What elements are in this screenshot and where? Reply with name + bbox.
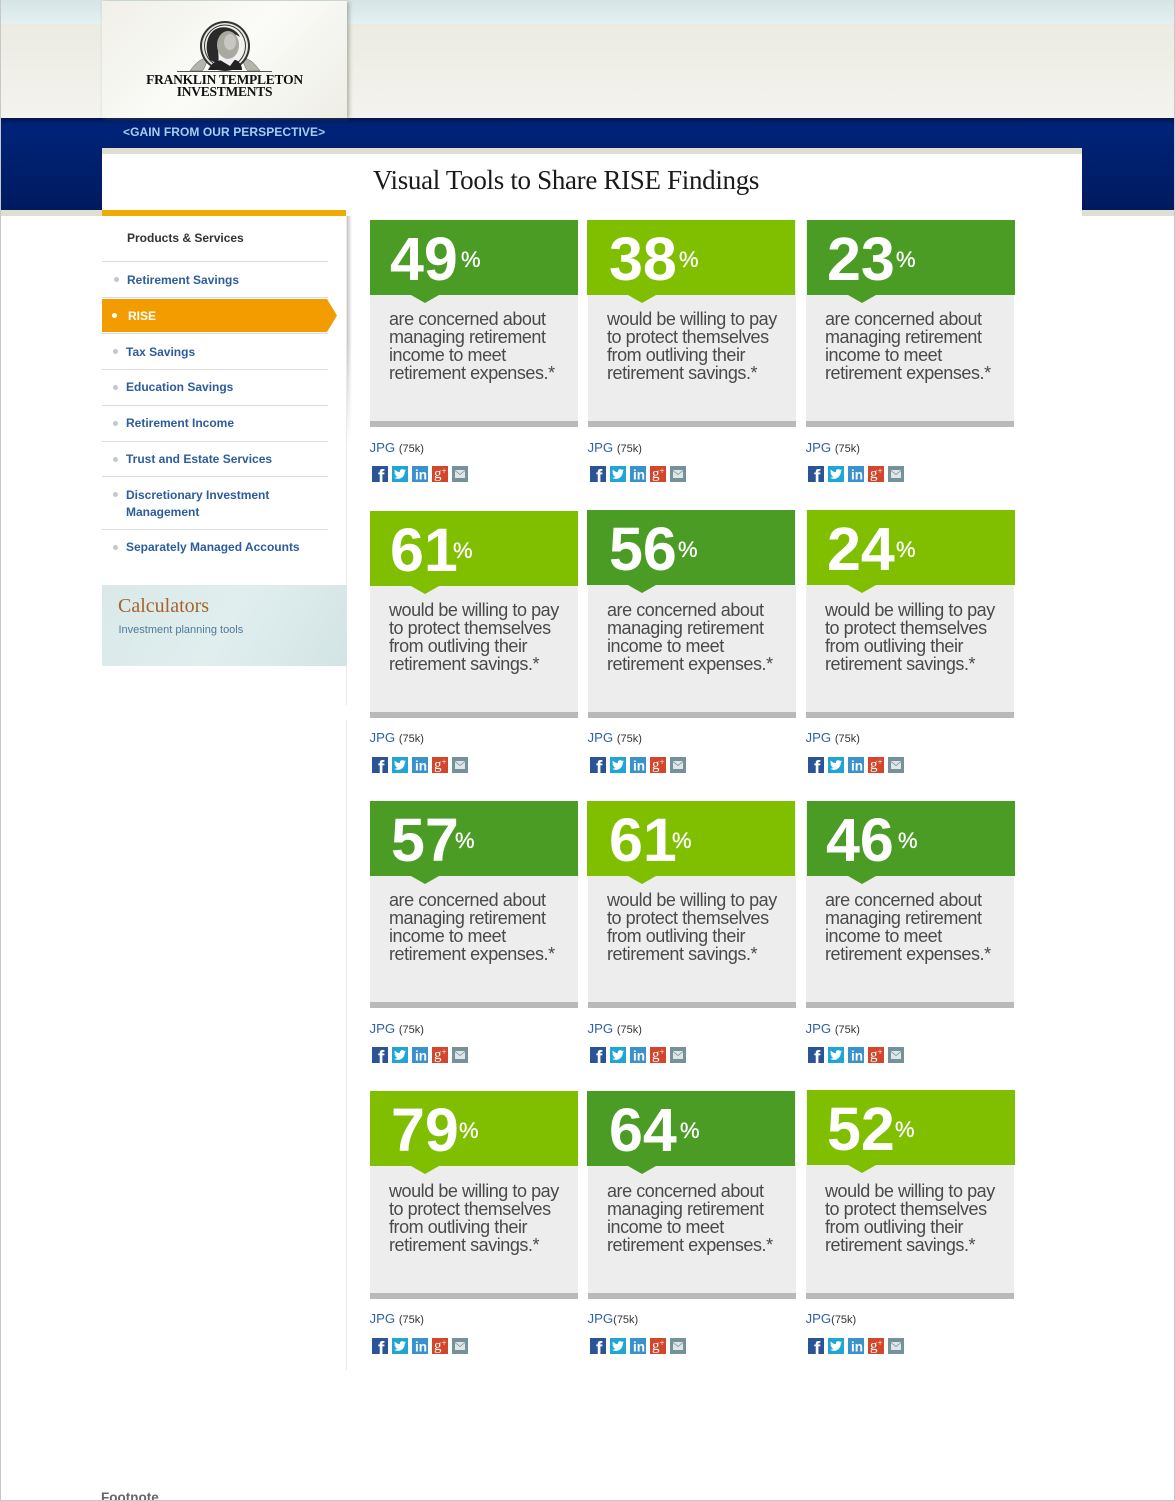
download link row 2 col 3: JPG (75k) <box>806 730 860 745</box>
card: 79%: from outliving their <box>389 1217 527 1237</box>
card: 23%: income to meet <box>825 345 942 365</box>
card: 23%: retirement expenses.* <box>825 363 991 383</box>
social icons row 2 col 3: + <box>878 757 883 767</box>
card: 56%: managing retirement <box>607 618 764 638</box>
nav item: RISE active <box>102 299 337 332</box>
download link row 1 col 1: JPG (75k) <box>370 440 424 455</box>
download link row 2 col 1: JPG (75k) <box>370 730 424 745</box>
nav item: RISE active: RISE <box>128 309 156 323</box>
card: 64%: are concerned about <box>607 1181 764 1201</box>
card: 46%: % <box>898 828 918 853</box>
card: 46%: income to meet <box>825 926 942 946</box>
card: 52%: retirement savings.* <box>825 1235 975 1255</box>
social icons row 4 col 2 <box>590 1338 686 1354</box>
card: 64%: retirement expenses.* <box>607 1235 773 1255</box>
social icons row 1 col 1 <box>372 466 468 482</box>
card: 52% <box>806 1090 1014 1299</box>
social icons row 1 col 2: + <box>660 466 665 476</box>
card: 38%: to protect themselves <box>607 327 769 347</box>
social icons row 4 col 2: + <box>660 1338 665 1348</box>
card: 24%: 24 <box>827 515 895 583</box>
social icons row 4 col 1 <box>372 1338 468 1354</box>
nav item: Tax Savings: Tax Savings <box>126 345 195 359</box>
card: 49%: 49 <box>390 225 458 293</box>
social icons row 3 col 3: + <box>878 1047 883 1057</box>
social icons row 1 col 3: + <box>878 466 883 476</box>
card: 52%: from outliving their <box>825 1217 963 1237</box>
nav item: Discretionary Investment Management: Management <box>126 505 199 519</box>
tagline: <GAIN FROM OUR PERSPECTIVE> <box>123 125 325 139</box>
download link row 1 col 3: JPG (75k) <box>806 440 860 455</box>
sidebar top accent <box>102 210 346 216</box>
card: 57%: managing retirement <box>389 908 546 928</box>
card: 23% <box>806 220 1014 427</box>
card: 49%: income to meet <box>389 345 506 365</box>
social icons row 4 col 2: g <box>652 1338 660 1354</box>
social icons row 2 col 1 <box>372 757 468 773</box>
card: 61%: to protect themselves <box>389 618 551 638</box>
card: 56%: income to meet <box>607 636 724 656</box>
social icons row 3 col 1 <box>372 1047 468 1063</box>
sidebar shadow <box>347 216 352 430</box>
calculators heading: Calculators <box>118 595 209 617</box>
card: 61%: retirement savings.* <box>389 654 539 674</box>
header top band <box>0 0 1175 24</box>
logo wordmark: INVESTMENTS <box>177 84 272 99</box>
card: 61%: % <box>453 538 473 563</box>
card: 24% <box>806 510 1014 718</box>
card: 23%: % <box>896 247 916 272</box>
social icons row 2 col 1: g <box>434 757 442 773</box>
download link row 3 col 3: JPG (75k) <box>806 1021 860 1036</box>
card: 64% <box>588 1091 796 1299</box>
card: 49%: managing retirement <box>389 327 546 347</box>
download link row 4 col 2: JPG(75k) <box>588 1311 638 1326</box>
download link row 2 col 2: JPG (75k) <box>588 730 642 745</box>
page title: Visual Tools to Share RISE Findings <box>373 165 759 195</box>
card: 64%: managing retirement <box>607 1199 764 1219</box>
card: 49%: retirement expenses.* <box>389 363 555 383</box>
social icons row 1 col 1: + <box>442 466 447 476</box>
card: 56%: % <box>678 537 698 562</box>
card: 46% <box>806 801 1014 1008</box>
social icons row 2 col 3 <box>808 757 904 773</box>
social icons row 3 col 2: g <box>652 1047 660 1063</box>
social icons row 4 col 1: + <box>442 1338 447 1348</box>
card: 52%: 52 <box>827 1095 895 1163</box>
social icons row 4 col 1: g <box>434 1338 442 1354</box>
card: 23%: are concerned about <box>825 309 982 329</box>
card: 56% <box>588 510 796 718</box>
calculators panel <box>102 585 347 666</box>
sidebar navigation <box>102 210 346 554</box>
social icons row 2 col 2: g <box>652 757 660 773</box>
social icons row 1 col 1: g <box>434 466 442 482</box>
download link row 3 col 1: JPG (75k) <box>370 1021 424 1036</box>
nav item: Education Savings: Education Savings <box>126 380 233 394</box>
social icons row 1 col 2 <box>590 466 686 482</box>
card: 79%: 79 <box>391 1096 459 1164</box>
card: 56%: retirement expenses.* <box>607 654 773 674</box>
card: 64%: 64 <box>609 1096 677 1164</box>
card: 52%: would be willing to pay <box>825 1181 995 1201</box>
download link row 3 col 2: JPG (75k) <box>588 1021 642 1036</box>
card: 61%: 61 <box>390 516 458 584</box>
header cream band <box>0 24 1175 118</box>
card: 64%: % <box>680 1118 700 1143</box>
card: 61% second: 61 <box>609 806 677 874</box>
card: 57%: % <box>455 828 475 853</box>
card: 61% second: from outliving their <box>607 926 745 946</box>
card: 52%: to protect themselves <box>825 1199 987 1219</box>
card: 24%: % <box>896 537 916 562</box>
card: 46%: managing retirement <box>825 908 982 928</box>
card: 56%: are concerned about <box>607 600 764 620</box>
social icons row 4 col 3: + <box>878 1338 883 1348</box>
nav item: Separately Managed Accounts: Separately Managed Accounts <box>126 540 300 554</box>
card: 49%: are concerned about <box>389 309 546 329</box>
card: 61% second: would be willing to pay <box>607 890 777 910</box>
social icons row 2 col 2 <box>590 757 686 773</box>
nav item: Discretionary Investment Management: Discretionary Investment <box>126 488 269 502</box>
download link row 1 col 2: JPG (75k) <box>588 440 642 455</box>
social icons row 2 col 3: g <box>870 757 878 773</box>
card: 57%: retirement expenses.* <box>389 944 555 964</box>
social icons row 3 col 2 <box>590 1047 686 1063</box>
social icons row 4 col 3 <box>808 1338 904 1354</box>
social icons row 1 col 3: g <box>870 466 878 482</box>
card: 38%: retirement savings.* <box>607 363 757 383</box>
card: 79%: retirement savings.* <box>389 1235 539 1255</box>
card: 61% <box>370 511 578 718</box>
social icons row 3 col 2: + <box>660 1047 665 1057</box>
social icons row 3 col 1: g <box>434 1047 442 1063</box>
card: 38%: would be willing to pay <box>607 309 777 329</box>
card: 61%: from outliving their <box>389 636 527 656</box>
card: 79%: to protect themselves <box>389 1199 551 1219</box>
card: 57%: 57 <box>391 806 459 874</box>
social icons row 2 col 2: + <box>660 757 665 767</box>
download link row 4 col 1: JPG (75k) <box>370 1311 424 1326</box>
sidebar right rule <box>346 216 347 1370</box>
social icons row 3 col 3 <box>808 1047 904 1063</box>
card: 79%: would be willing to pay <box>389 1181 559 1201</box>
icon: Franklin portrait emblem <box>177 21 272 72</box>
card: 61% second: % <box>672 828 692 853</box>
card: 49% <box>370 220 578 427</box>
card: 61% second: to protect themselves <box>607 908 769 928</box>
card: 23%: managing retirement <box>825 327 982 347</box>
social icons row 4 col 3: g <box>870 1338 878 1354</box>
card: 24%: would be willing to pay <box>825 600 995 620</box>
card: 57%: are concerned about <box>389 890 546 910</box>
card: 24%: from outliving their <box>825 636 963 656</box>
social icons row 2 col 1: + <box>442 757 447 767</box>
card: 23%: 23 <box>827 225 895 293</box>
card: 46%: are concerned about <box>825 890 982 910</box>
card: 38%: from outliving their <box>607 345 745 365</box>
logo wordmark: FRANKLIN TEMPLETON <box>146 72 303 87</box>
nav item: Trust and Estate Services: Trust and Estate Services <box>126 452 272 466</box>
content panel <box>102 148 1082 216</box>
nav heading: Products & Services <box>127 231 244 245</box>
card: 61% second <box>588 801 796 1008</box>
social icons row 3 col 3: g <box>870 1047 878 1063</box>
card: 38%: % <box>679 247 699 272</box>
download link row 4 col 3: JPG(75k) <box>806 1311 856 1326</box>
card: 49%: % <box>461 247 481 272</box>
nav item: Discretionary Investment Management <box>126 488 270 519</box>
banner lower strip <box>0 210 1175 216</box>
social icons row 3 col 1: + <box>442 1047 447 1057</box>
card: 46%: 46 <box>826 806 894 874</box>
card: 57% <box>370 801 578 1008</box>
card: 64%: income to meet <box>607 1217 724 1237</box>
nav item: Retirement Savings: Retirement Savings <box>127 273 239 287</box>
card: 57%: income to meet <box>389 926 506 946</box>
card: 61%: would be willing to pay <box>389 600 559 620</box>
card: 38%: 38 <box>609 225 677 293</box>
card: 56%: 56 <box>609 515 677 583</box>
calculators subtext: Investment planning tools <box>118 624 243 636</box>
nav item: Retirement Income: Retirement Income <box>126 416 234 430</box>
navy banner <box>0 118 1175 210</box>
card: 24%: retirement savings.* <box>825 654 975 674</box>
card: 46%: retirement expenses.* <box>825 944 991 964</box>
card: 52%: % <box>895 1117 915 1142</box>
logo card <box>102 1 347 118</box>
card: 79%: % <box>459 1118 479 1143</box>
social icons row 1 col 3 <box>808 466 904 482</box>
card: 24%: to protect themselves <box>825 618 987 638</box>
card: 61% second: retirement savings.* <box>607 944 757 964</box>
social icons row 1 col 2: g <box>652 466 660 482</box>
logo wordmark <box>146 72 303 99</box>
card: 38% <box>588 220 796 427</box>
card: 79% <box>370 1091 578 1299</box>
